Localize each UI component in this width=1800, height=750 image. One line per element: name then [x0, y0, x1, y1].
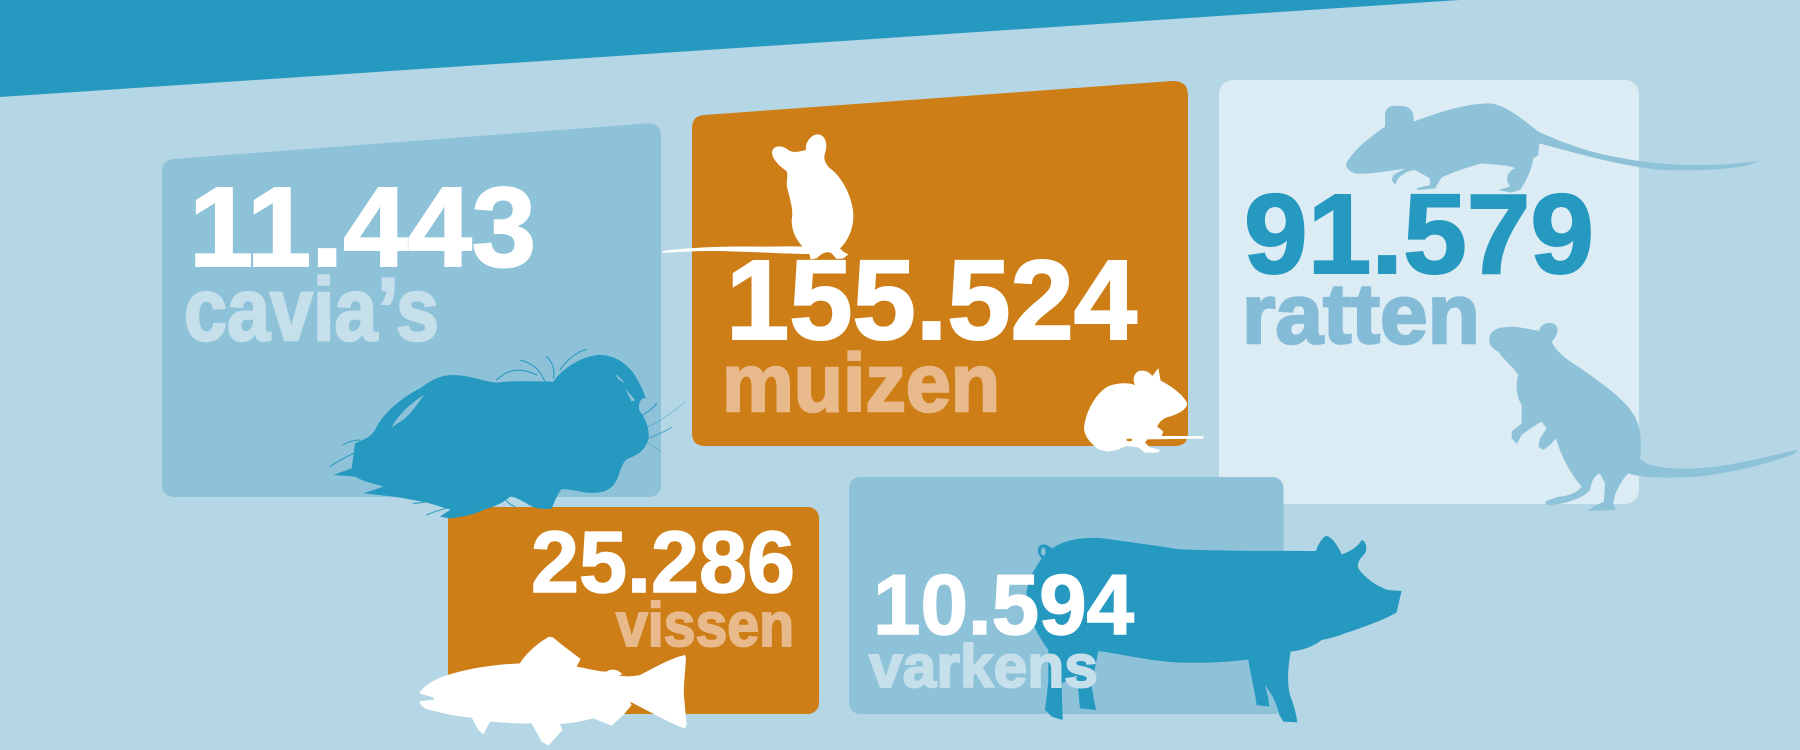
card: muizen [692, 81, 1188, 446]
number: 10.594: 10.594 [873, 558, 1134, 653]
card: varkens [849, 477, 1284, 714]
number: 11.443: 11.443 [189, 164, 536, 290]
panel: varkens [849, 477, 1402, 722]
panel: ratten [1219, 80, 1797, 511]
icon: fish [419, 637, 687, 746]
label: muizen: muizen [722, 338, 1000, 429]
panel: vissen [419, 507, 819, 746]
icon: rat standing [1489, 323, 1797, 511]
icon: mouse standing [663, 134, 853, 259]
label: vissen: vissen [616, 591, 794, 660]
number: 25.286: 25.286 [531, 514, 795, 611]
label: varkens: varkens [869, 633, 1098, 700]
label: cavia's: cavia’s [184, 259, 439, 359]
label: ratten: ratten [1242, 267, 1480, 361]
card: cavia's [162, 123, 661, 497]
icon: pig [1027, 536, 1402, 722]
number: 155.524: 155.524 [726, 237, 1137, 363]
panel: muizen [663, 81, 1203, 453]
number: 91.579: 91.579 [1244, 171, 1594, 297]
card: vissen [448, 507, 819, 714]
top banner [0, 0, 1460, 97]
icon: mouse sitting [1084, 368, 1203, 453]
panel: cavia's [162, 123, 685, 518]
icon: rat walking [1346, 103, 1759, 193]
card: ratten [1219, 80, 1639, 504]
icon: guinea pig [330, 349, 685, 518]
